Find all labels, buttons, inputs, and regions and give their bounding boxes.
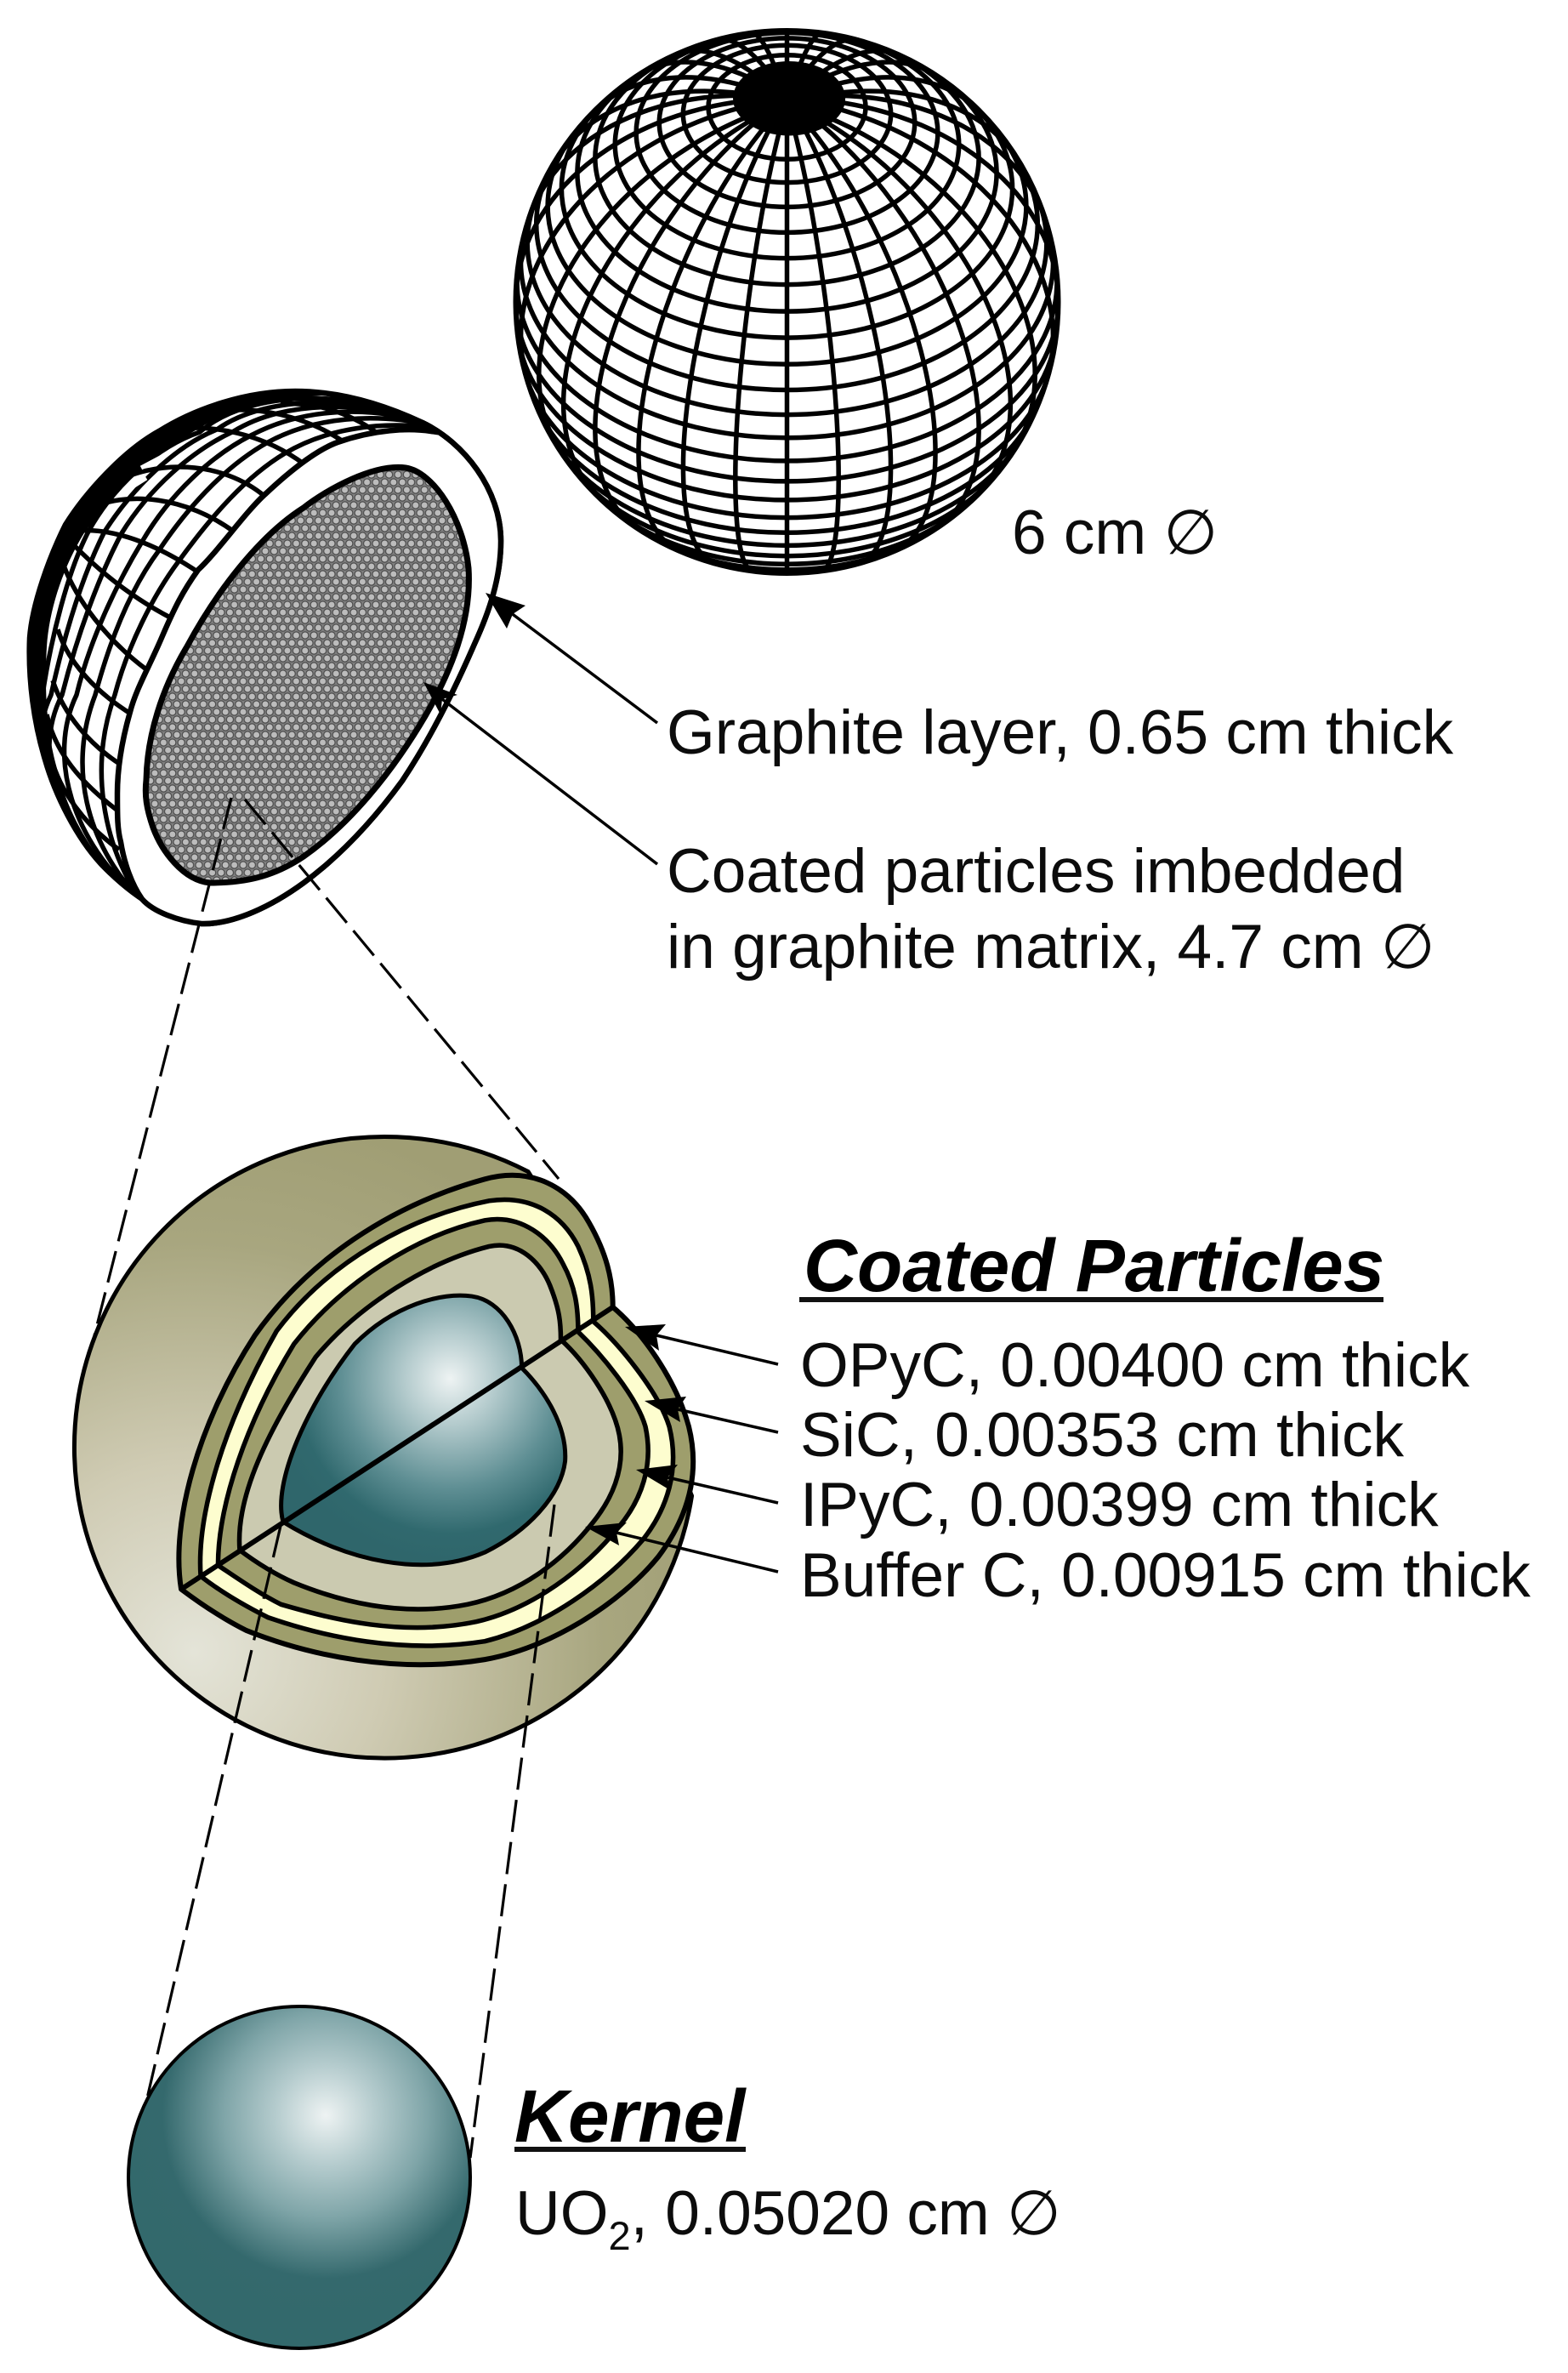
arrow: IPyC [636,1465,778,1503]
particle matrix face [145,467,469,883]
icon: cut fuel sphere showing graphite shell and particle matrix [17,383,501,924]
layer list: Buffer C, 0.00915 cm thick [800,1541,1531,1610]
label: kernel composition: , 0.05020 cm ∅ [631,2179,1061,2248]
buffer layer [239,1245,621,1609]
outer surface of particle [74,1136,692,1758]
heading: Kernel: Kernel [514,2075,747,2158]
cut line [181,1307,613,1589]
kernel core [281,1295,565,1565]
icon: kernel sphere [128,2006,470,2348]
label: sphere diameter: 6 cm ∅ [1012,498,1218,567]
layer list: IPyC, 0.00399 cm thick [800,1471,1439,1539]
label: coated particles in matrix: in graphite matrix, 4.7 cm ∅ [667,913,1434,982]
label: kernel composition: 2 [609,2213,631,2258]
layer list: SiC, 0.00353 cm thick [800,1401,1405,1470]
SiC layer [201,1199,673,1646]
heading: Coated Particles: Coated Particles [804,1225,1384,1307]
arrow: OPyC [625,1324,778,1364]
dense shaded band along dome edge [32,394,323,854]
OPyC layer [179,1175,693,1665]
white graphite layer [117,423,501,924]
arrow: to particle matrix [423,682,657,864]
arrow: to graphite layer [486,593,657,723]
layer list: OPyC, 0.00400 cm thick [800,1331,1470,1400]
arrow: Buffer C [585,1522,778,1572]
layer list [800,1331,1531,1610]
label: coated particles in matrix: Coated particles imbedded [667,837,1405,906]
arrow: SiC [645,1397,778,1432]
icon: coated particle cross-section [74,1136,693,1758]
label: graphite layer: Graphite layer, 0.65 cm thick [667,698,1454,767]
dashed projection lines [94,798,559,2158]
IPyC layer [218,1220,648,1628]
icon: full fuel sphere with latitude and longitude grid [515,31,1058,573]
label: kernel composition: UO [515,2179,609,2248]
